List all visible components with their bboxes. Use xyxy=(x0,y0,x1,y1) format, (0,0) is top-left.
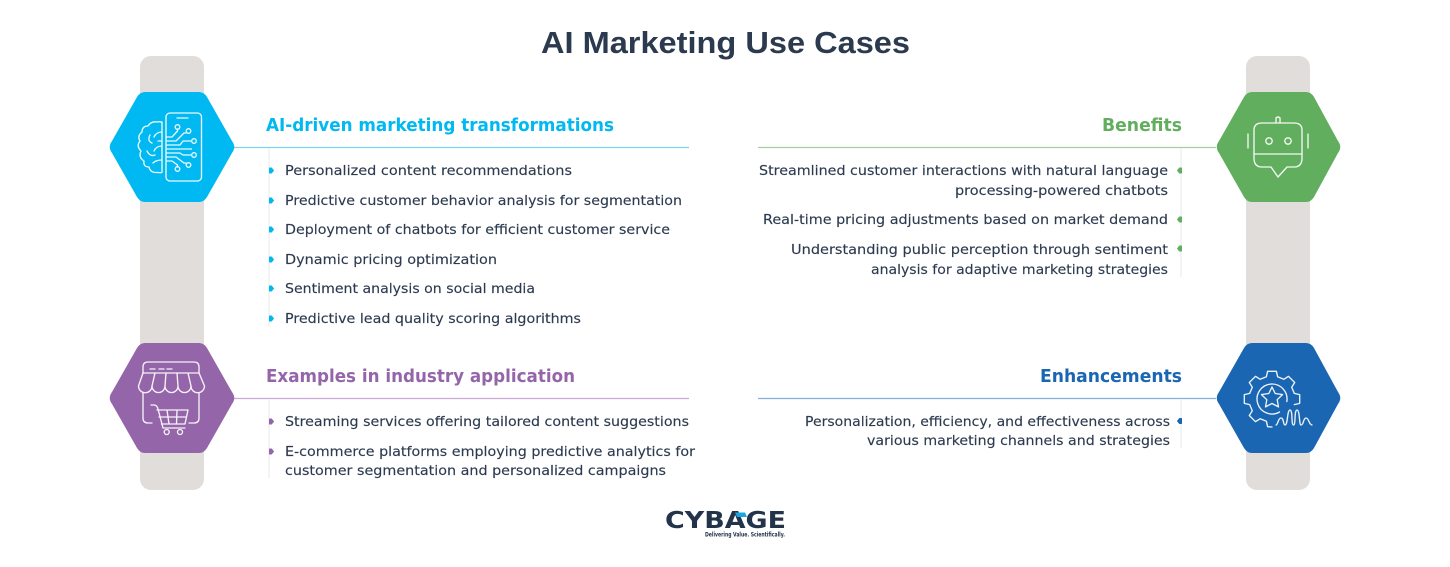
bullet list: various marketing channels and strategies xyxy=(867,433,1170,449)
heading: Examples in industry application xyxy=(266,367,575,387)
left vertical pill xyxy=(140,56,204,490)
bullet list: Understanding public perception through sentiment xyxy=(791,242,1168,258)
bullet list: processing-powered chatbots xyxy=(955,183,1168,199)
title: AI Marketing Use Cases xyxy=(541,25,910,60)
panel: AI-driven marketing transformations xyxy=(110,92,689,327)
bullet list: analysis for adaptive marketing strategies xyxy=(871,262,1168,278)
logo: Cybage: Delivering Value. Scientifically. xyxy=(705,532,785,538)
logo: Cybage: CYBAGE xyxy=(665,508,786,534)
panel: Benefits xyxy=(758,92,1340,278)
panel: Examples in industry application xyxy=(110,343,695,479)
panel: Enhancements xyxy=(758,343,1340,453)
bullet list xyxy=(270,163,682,327)
heading: Enhancements xyxy=(1040,367,1182,387)
bullet list: Personalized content recommendations xyxy=(285,163,572,179)
bullet list: Predictive lead quality scoring algorithms xyxy=(285,311,581,327)
heading: AI-driven marketing transformations xyxy=(266,116,614,136)
bullet list: E-commerce platforms employing predictive analytics for xyxy=(285,444,695,460)
heading: Benefits xyxy=(1102,116,1182,136)
bullet list: Streaming services offering tailored content suggestions xyxy=(285,414,689,430)
right vertical pill xyxy=(1246,56,1310,490)
icon: brain and phone hexagon xyxy=(110,92,234,202)
bullet list: Sentiment analysis on social media xyxy=(285,281,535,297)
bullet list: Predictive customer behavior analysis for segmentation xyxy=(285,193,682,209)
bullet list: Dynamic pricing optimization xyxy=(285,252,497,268)
icon: gear and star hexagon xyxy=(1217,343,1340,453)
icon: chatbot hexagon xyxy=(1217,92,1340,202)
bullet list: Personalization, efficiency, and effectiveness across xyxy=(805,414,1170,430)
icon: storefront and cart hexagon xyxy=(110,343,234,453)
bullet list: Streamlined customer interactions with natural language xyxy=(759,163,1168,179)
bullet list xyxy=(759,163,1182,278)
bullet list: Deployment of chatbots for efficient customer service xyxy=(285,222,670,238)
bullet list: customer segmentation and personalized campaigns xyxy=(285,463,666,479)
bullet list: Real-time pricing adjustments based on market demand xyxy=(763,212,1168,228)
bullet list xyxy=(805,414,1182,449)
bullet list xyxy=(270,414,695,479)
